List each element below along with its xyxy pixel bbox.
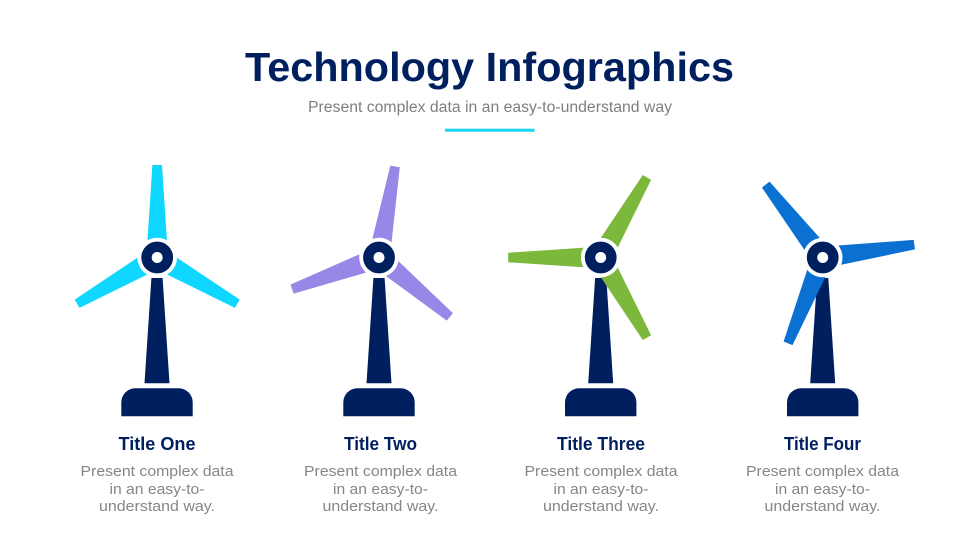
text block: description four: Present complex data — [746, 463, 900, 480]
panel: turbine two — [289, 165, 458, 515]
text block: description four — [746, 463, 900, 515]
text block: description two — [304, 463, 458, 515]
icon: turbine one — [72, 165, 242, 416]
text block: description two: Present complex data — [304, 463, 458, 480]
title: Technology Infographics — [245, 44, 734, 90]
text block: description three: in an easy-to- — [554, 481, 648, 498]
text block: description three — [524, 463, 678, 515]
heading: title two: Title Two — [344, 434, 417, 454]
panel: turbine one — [72, 165, 242, 515]
text block: description three: understand way. — [543, 498, 659, 515]
subtitle: Present complex data in an easy-to-understand way — [308, 99, 672, 116]
text block: description one: Present complex data — [80, 463, 234, 480]
text block: description four: understand way. — [764, 498, 880, 515]
text block: description one: in an easy-to- — [110, 481, 204, 498]
heading: title three: Title Three — [557, 434, 645, 454]
heading: title one: Title One — [118, 434, 196, 454]
text block: description four: in an easy-to- — [775, 481, 870, 498]
panel: turbine four — [746, 178, 916, 515]
accent line — [445, 129, 534, 132]
text block: description two: in an easy-to- — [333, 481, 428, 498]
icon: turbine four — [758, 178, 916, 416]
text block: description one — [80, 463, 234, 515]
icon: turbine two — [289, 165, 456, 416]
text block: description three: Present complex data — [524, 463, 678, 480]
icon: turbine three — [508, 172, 656, 416]
text block: description one: understand way. — [99, 498, 215, 515]
panel: turbine three — [508, 172, 678, 515]
text block: description two: understand way. — [322, 498, 438, 515]
heading: title four: Title Four — [784, 434, 861, 454]
